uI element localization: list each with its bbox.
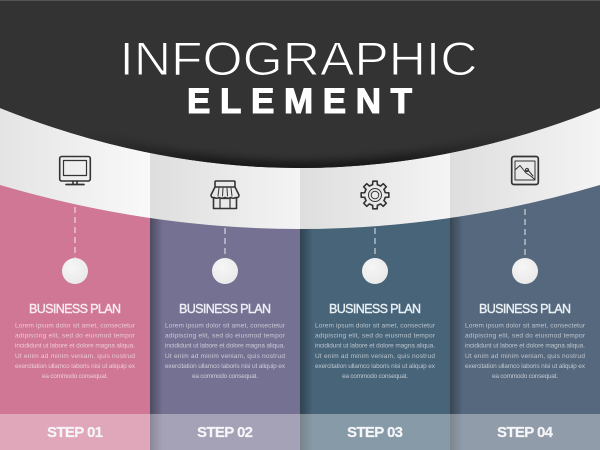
curved white band	[0, 108, 600, 229]
panel: step 2: Ut enim ad minim veniam, quis nostrud	[165, 353, 285, 360]
panel: step 2: adipiscing elit, sed do eiusmod tempor	[165, 333, 286, 340]
subtitle: ELEMENT	[187, 82, 412, 121]
panel: step 4: adipiscing elit, sed do eiusmod tempor	[465, 333, 586, 340]
panel: step 3: adipiscing elit, sed do eiusmod tempor	[315, 333, 436, 340]
icon: picture	[512, 156, 538, 184]
panel: step 3: Ut enim ad minim veniam, quis nostrud	[315, 353, 435, 360]
panel: step 2: ea commodo consequat.	[192, 373, 258, 380]
panel: step 1	[0, 170, 150, 450]
panel: step 3	[300, 170, 450, 450]
panel: step 1: exercitation ullamco laboris nisi ut aliquip ex	[15, 363, 136, 370]
panel: step 3: BUSINESS PLAN	[329, 302, 421, 316]
panel: step 4: ea commodo consequat.	[492, 373, 558, 380]
panel: step 3: STEP 03	[347, 424, 403, 441]
dark curved header	[0, 0, 600, 168]
panel: step 4: BUSINESS PLAN	[479, 302, 571, 316]
panel: step 4: incididunt ut labore et dolore magna aliqua.	[465, 343, 585, 350]
icon: store	[211, 181, 239, 208]
panel: step 3: Lorem ipsum dolor sit amet, consectetur	[315, 322, 436, 330]
panel: step 1: adipiscing elit, sed do eiusmod tempor	[15, 333, 136, 340]
panel: step 2: STEP 02	[197, 424, 253, 441]
panel: step 2	[150, 170, 300, 450]
panel: step 4: STEP 04	[497, 424, 554, 441]
panel: step 2: BUSINESS PLAN	[179, 302, 271, 316]
icon: monitor	[60, 156, 90, 184]
panel: step 1: incididunt ut labore et dolore magna aliqua.	[15, 343, 135, 350]
panel: step 2: incididunt ut labore et dolore magna aliqua.	[165, 343, 285, 350]
panel: step 1: STEP 01	[47, 424, 103, 441]
panel: step 1: Ut enim ad minim veniam, quis nostrud	[15, 353, 135, 360]
panel: step 4: Lorem ipsum dolor sit amet, consectetur	[465, 322, 586, 330]
panel: step 3: incididunt ut labore et dolore magna aliqua.	[315, 343, 435, 350]
panel: step 2: Lorem ipsum dolor sit amet, consectetur	[165, 322, 286, 330]
panel: step 3: ea commodo consequat.	[342, 373, 408, 380]
panel: step 1: ea commodo consequat.	[42, 373, 108, 380]
panel: step 1: Lorem ipsum dolor sit amet, consectetur	[15, 322, 136, 330]
panel: step 1: BUSINESS PLAN	[29, 302, 121, 316]
panel: step 4: exercitation ullamco laboris nisi ut aliquip ex	[465, 363, 586, 370]
title: INFOGRAPHIC	[120, 32, 478, 85]
panel: step 4: Ut enim ad minim veniam, quis nostrud	[465, 353, 585, 360]
icon: gear	[361, 181, 389, 209]
panel: step 4	[450, 170, 600, 450]
panel: step 2: exercitation ullamco laboris nisi ut aliquip ex	[165, 363, 286, 370]
panel: step 3: exercitation ullamco laboris nisi ut aliquip ex	[315, 363, 436, 370]
